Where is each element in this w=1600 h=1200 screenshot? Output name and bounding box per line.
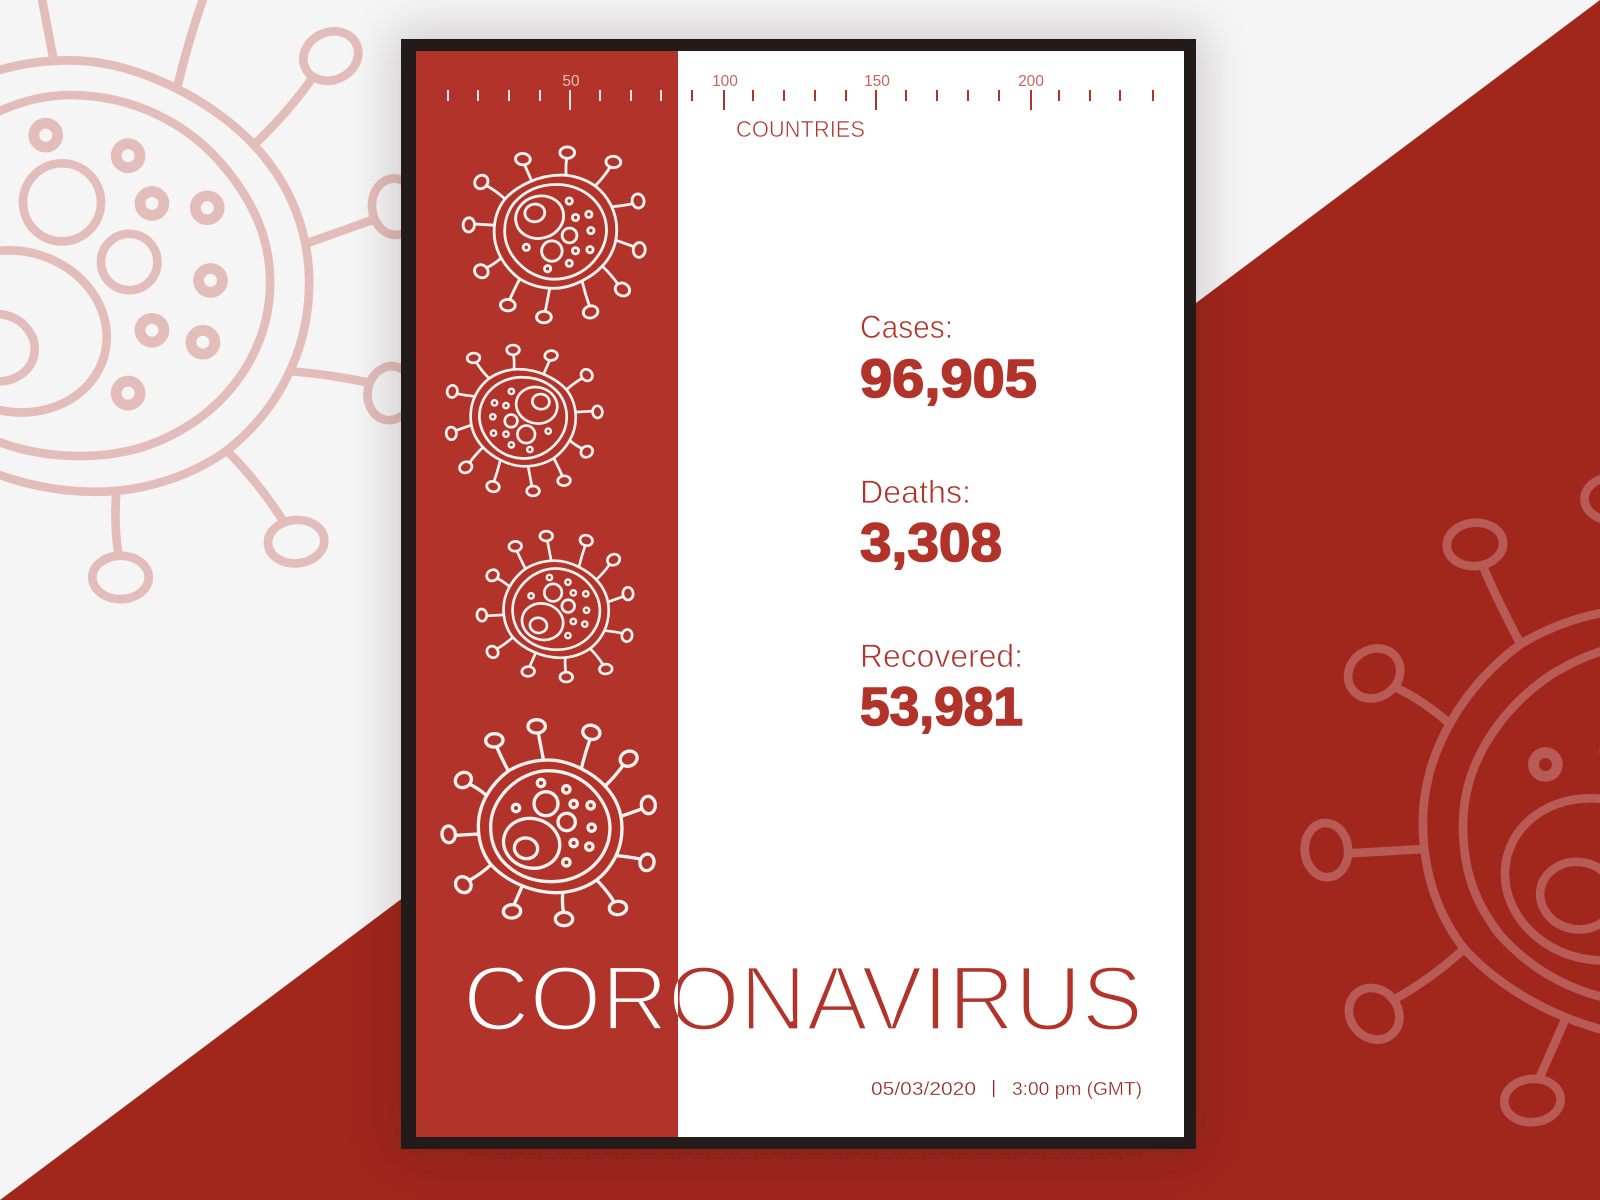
title: CORONAVIRUS — [463, 948, 1143, 1050]
date and time — [871, 1079, 1142, 1099]
icon: virus 2 — [446, 345, 603, 496]
stat: cases — [860, 309, 1037, 409]
stat: deaths — [860, 474, 1002, 573]
ruler label 50: 50 — [562, 73, 580, 90]
date and time: 3:00 pm (GMT) — [1012, 1079, 1142, 1099]
date and time: 05/03/2020 — [871, 1079, 976, 1099]
ruler label 150: 150 — [864, 73, 890, 90]
ruler scale — [448, 90, 1153, 110]
stat: recovered: Recovered: — [860, 638, 1023, 674]
stat: cases: Cases: — [860, 309, 953, 345]
stat: deaths: 3,308 — [860, 513, 1002, 573]
white poster panel — [416, 51, 1184, 1137]
title: CORONAVIRUS — [463, 948, 1143, 1050]
ruler axis title: COUNTRIES — [736, 116, 865, 142]
icon: virus 4 — [441, 720, 656, 926]
red column panel — [416, 51, 678, 1137]
icon: virus 3 — [476, 531, 634, 682]
stat: recovered: 53,981 — [860, 677, 1023, 737]
icon: large faded virus, left — [0, 0, 420, 599]
icon: virus 1 — [463, 147, 646, 323]
ruler label 100: 100 — [712, 73, 738, 90]
ruler label 200: 200 — [1018, 73, 1044, 90]
icon: large faded virus, right — [1303, 477, 1600, 1147]
poster frame — [401, 39, 1196, 1149]
title — [469, 968, 1138, 1030]
stat: cases: 96,905 — [860, 349, 1037, 409]
stat: deaths: Deaths: — [860, 474, 971, 510]
stat: recovered — [860, 638, 1023, 737]
poster content — [416, 51, 1184, 1158]
